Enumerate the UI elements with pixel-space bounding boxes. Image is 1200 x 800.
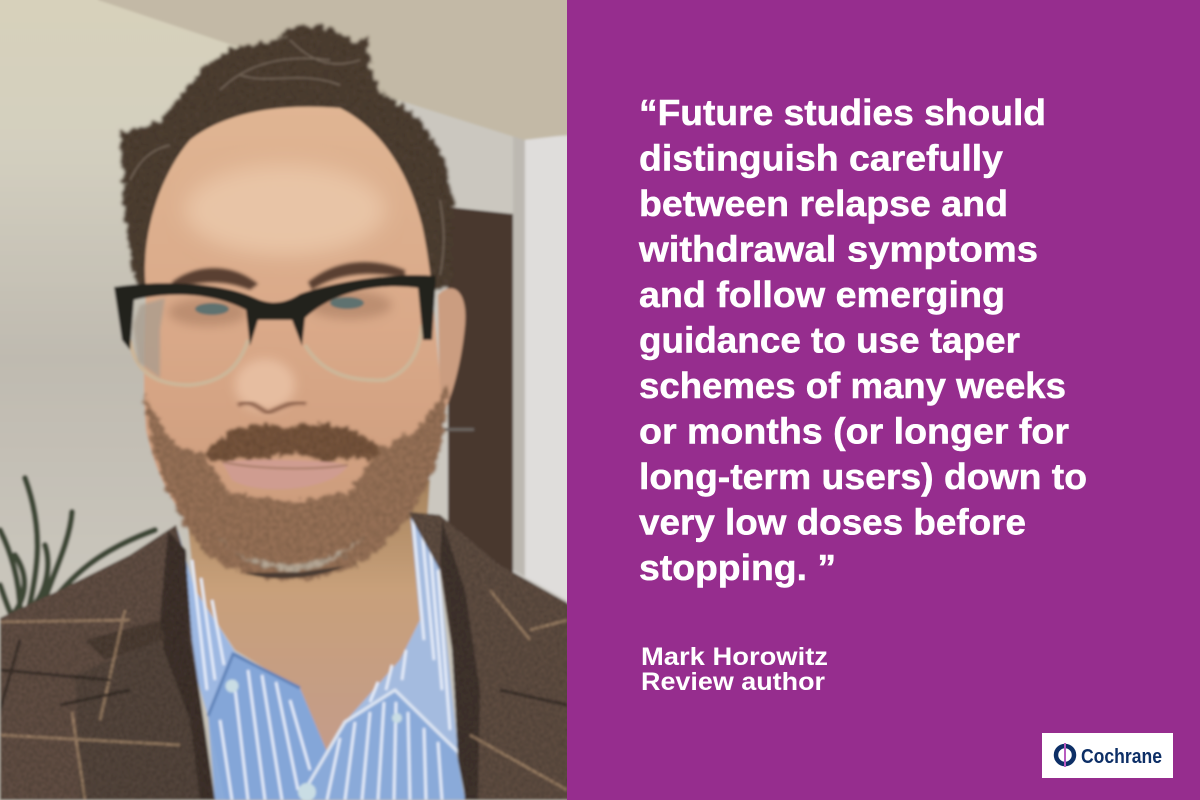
attribution: Mark Horowitz <box>641 643 828 671</box>
quote text: withdrawal symptoms <box>638 228 1038 270</box>
quote text: or months (or longer for <box>639 410 1069 452</box>
quote text: schemes of many weeks <box>639 365 1066 406</box>
photo background: plant <box>0 478 155 612</box>
shirt <box>178 510 465 800</box>
glasses <box>114 275 436 385</box>
hair <box>120 25 454 300</box>
quote text: distinguish carefully <box>639 138 1003 178</box>
quote text: between relapse and <box>639 183 1008 224</box>
quote text: very low doses before <box>639 502 1026 542</box>
icon: Cochrane ring <box>1056 743 1074 767</box>
quote text <box>638 92 1087 588</box>
ear <box>438 288 465 420</box>
neck <box>185 480 430 752</box>
head <box>142 104 442 506</box>
jacket <box>0 512 580 800</box>
attribution: Review author <box>641 668 825 696</box>
quote text: stopping. ” <box>639 547 836 588</box>
moustache <box>205 423 380 460</box>
attribution <box>641 643 828 696</box>
quote text: guidance to use taper <box>639 320 1020 360</box>
photo background: room <box>0 0 600 800</box>
photo: portrait of Mark Horowitz <box>0 0 600 800</box>
purple quote panel background <box>567 0 1200 800</box>
beard <box>144 385 448 579</box>
quote text: “Future studies should <box>639 92 1046 133</box>
nose <box>235 359 306 413</box>
Cochrane logo <box>1042 733 1173 778</box>
eyebrows <box>172 262 405 290</box>
Cochrane logo: Cochrane <box>1081 745 1162 768</box>
quote text: and follow emerging <box>639 274 1005 315</box>
quote text: long-term users) down to <box>639 456 1087 497</box>
forehead highlight <box>185 165 385 255</box>
chin grey beard <box>222 540 361 574</box>
hair strands <box>130 40 444 275</box>
lips <box>222 460 348 489</box>
